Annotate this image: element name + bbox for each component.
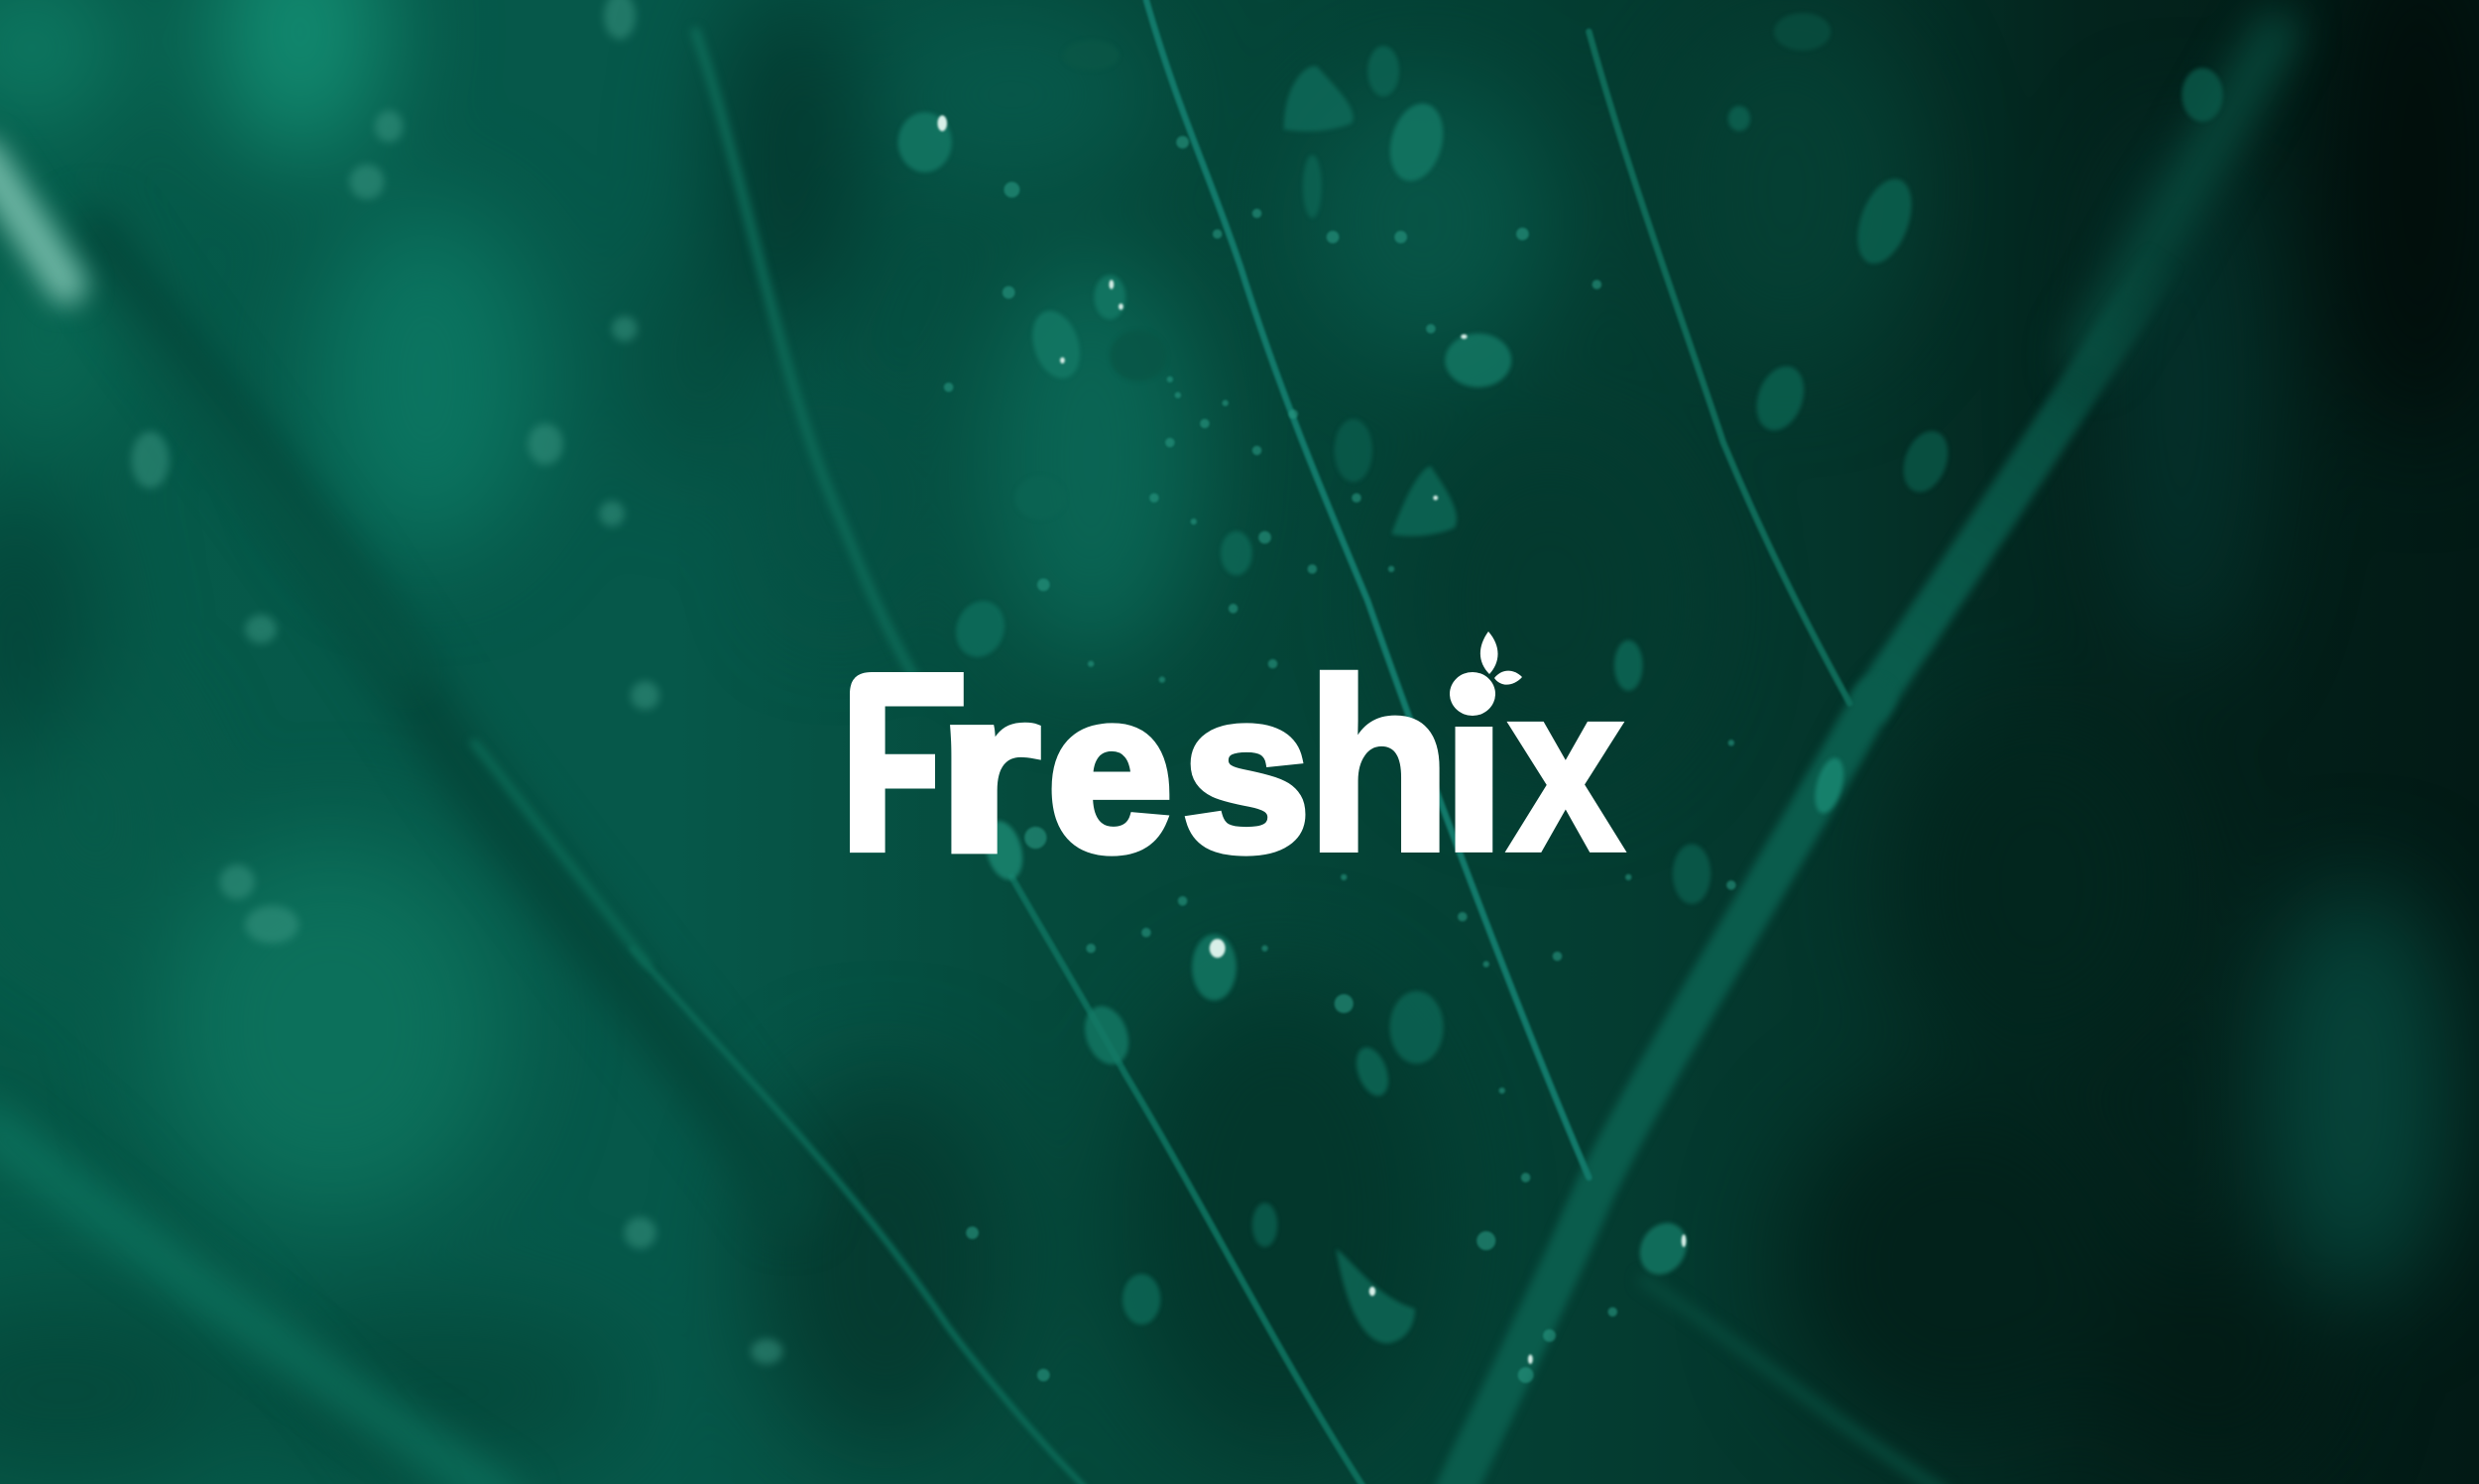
droplet highlights [937, 115, 1686, 1364]
background: dark diagonal leaf folds [0, 237, 790, 1484]
water droplets: large [898, 13, 2223, 1343]
logo letters: F [837, 622, 969, 904]
logo: Freshix wordmark [850, 631, 1626, 856]
logo letters: s [1182, 644, 1311, 898]
water droplets: small beads [944, 136, 1736, 1383]
icon: leaf sprout over the i [1450, 631, 1522, 716]
water droplets: blurred foreground on left side [131, 0, 782, 1364]
logo letters [850, 670, 1626, 856]
logo letters: e [1047, 645, 1173, 898]
logo letters: h [1306, 629, 1452, 902]
logo letters: x [1508, 635, 1623, 900]
logo letters: i [1442, 634, 1506, 901]
logo letters: r [938, 644, 1040, 898]
